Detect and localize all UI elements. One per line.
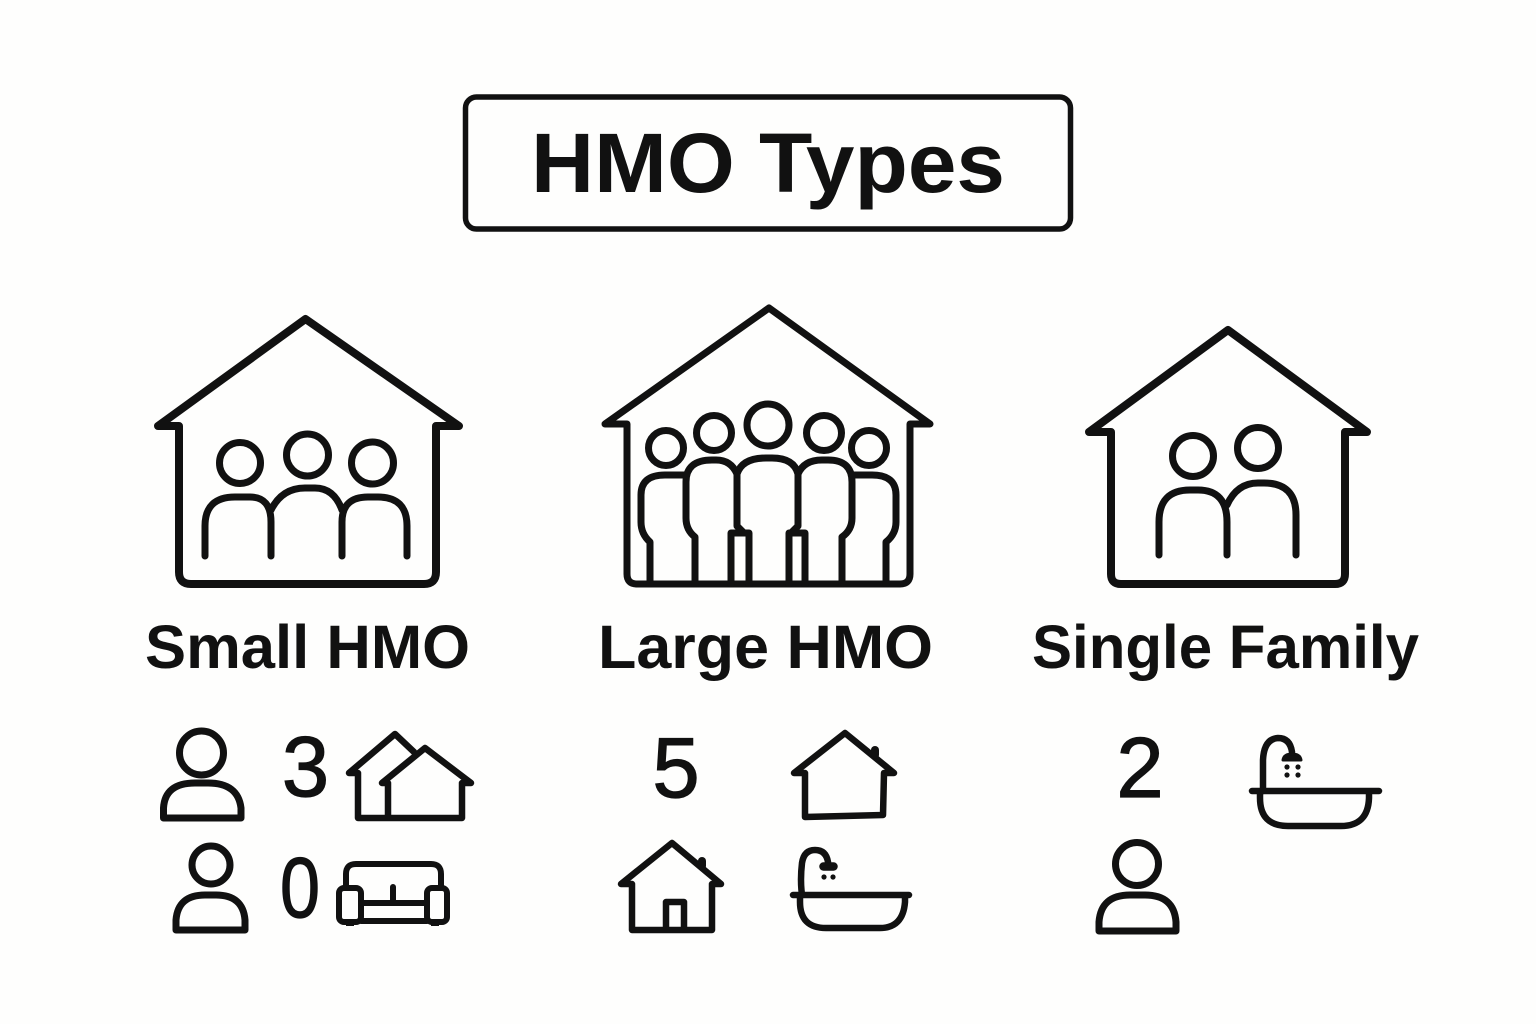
icon: bathtub [793, 850, 909, 928]
icon: house with five people [605, 308, 930, 584]
number 3: 3 [282, 720, 329, 815]
panel: small HMO [145, 319, 471, 936]
number 2: 2 [1116, 721, 1164, 816]
label: small HMO: Small HMO [145, 613, 470, 681]
panel: large HMO [598, 308, 933, 930]
label: large HMO: Large HMO [598, 613, 933, 681]
icon: house with three people [158, 319, 459, 584]
icon: two houses [349, 734, 471, 818]
title box: HMO Types [531, 116, 1005, 210]
number 0: 0 [280, 841, 320, 936]
icon: person [1099, 842, 1176, 931]
icon: house with two people [1089, 330, 1367, 584]
icon: sofa [339, 864, 447, 926]
panel: single family [1032, 330, 1419, 931]
icon: house with door [621, 843, 721, 930]
icon: person [164, 731, 241, 818]
label: single family: Single Family [1032, 613, 1419, 681]
icon: bathtub with shower [1252, 738, 1379, 826]
icon: house with chimney [794, 733, 894, 817]
number 5: 5 [652, 721, 700, 816]
icon: person small [176, 846, 245, 930]
title box [466, 97, 1070, 229]
